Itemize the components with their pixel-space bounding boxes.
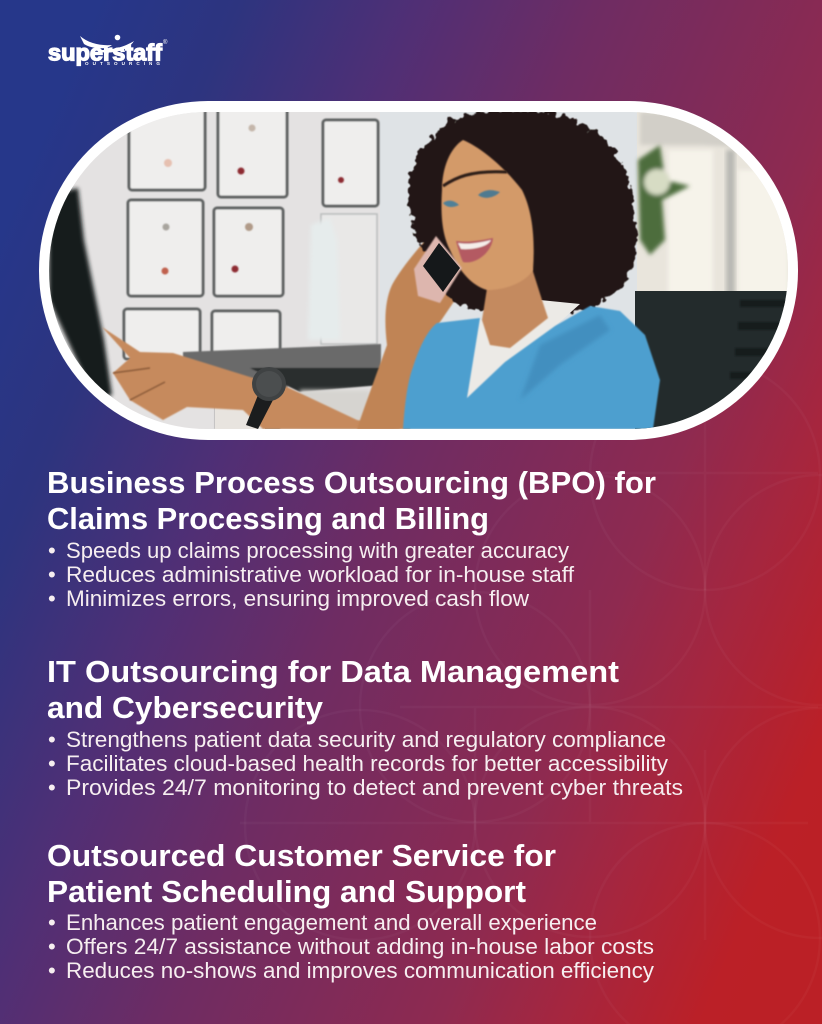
heading: Outsourced Customer Service for <box>47 838 556 873</box>
bullet list: • <box>48 727 56 752</box>
bullet list: • <box>48 775 56 800</box>
bullet list: Reduces administrative workload for in-house staff <box>66 562 575 587</box>
scrubs shadow <box>523 316 608 395</box>
heading: Business Process Outsourcing (BPO) for <box>47 465 656 500</box>
bullet list: Provides 24/7 monitoring to detect and prevent cyber threats <box>66 775 683 800</box>
bullet list: Enhances patient engagement and overall experience <box>66 910 597 935</box>
water bottle <box>310 220 322 342</box>
bullet list: Facilitates cloud-based health records for better accessibility <box>66 751 668 776</box>
logo wordmark: superstaff <box>48 40 162 66</box>
heading: Claims Processing and Billing <box>47 501 489 536</box>
phone <box>414 236 462 303</box>
bullet list: • <box>48 958 56 983</box>
blue scrubs <box>403 306 660 429</box>
desk shelf <box>183 344 381 429</box>
right doorway and window <box>637 112 790 302</box>
bullet list: • <box>48 562 56 587</box>
section 2: IT outsourcing for data management and cybersecurity <box>47 654 683 800</box>
bullet list: Minimizes errors, ensuring improved cash flow <box>66 586 529 611</box>
bullet list: Speeds up claims processing with greater accuracy <box>66 538 569 563</box>
plant <box>638 145 690 255</box>
computer monitor <box>49 188 112 400</box>
dark filing cabinet <box>635 291 790 429</box>
fading certificate behind bottle <box>321 214 377 344</box>
heading: Patient Scheduling and Support <box>47 874 526 909</box>
logo: SuperStaff Outsourcing <box>48 35 168 66</box>
heading: and Cybersecurity <box>47 690 324 725</box>
office wall <box>49 112 389 429</box>
neck and chest <box>482 262 548 348</box>
bullet list: Strengthens patient data security and regulatory compliance <box>66 727 666 752</box>
smile <box>456 238 493 262</box>
bullet list: Offers 24/7 assistance without adding in-house labor costs <box>66 934 654 959</box>
finger creases <box>113 368 165 400</box>
framed certificates <box>124 108 378 359</box>
face <box>441 140 534 290</box>
logo tagline: OUTSOURCING <box>85 61 160 66</box>
bullet list: • <box>48 586 56 611</box>
logo dot <box>115 35 120 40</box>
bullet list: • <box>48 910 56 935</box>
logo registered mark: ® <box>163 39 168 46</box>
section 1: BPO for claims processing and billing <box>47 465 656 611</box>
certificate seals <box>162 124 344 274</box>
photo: nurse on the phone at a desk <box>49 108 790 429</box>
bullet list: • <box>48 538 56 563</box>
pointing arm <box>102 327 400 429</box>
heading: IT Outsourcing for Data Management <box>47 654 619 689</box>
hair <box>409 109 636 312</box>
bullet list: • <box>48 751 56 776</box>
bullet list: • <box>48 934 56 959</box>
wristwatch <box>246 367 286 429</box>
bullet list: Reduces no-shows and improves communication efficiency <box>66 958 654 983</box>
phone-holding arm <box>357 233 455 429</box>
eyes and brows <box>443 172 507 207</box>
logo swoosh <box>80 36 134 53</box>
section 3: outsourced customer service <box>47 838 654 983</box>
white undershirt <box>466 300 580 400</box>
photo frame: white pill <box>39 101 798 440</box>
